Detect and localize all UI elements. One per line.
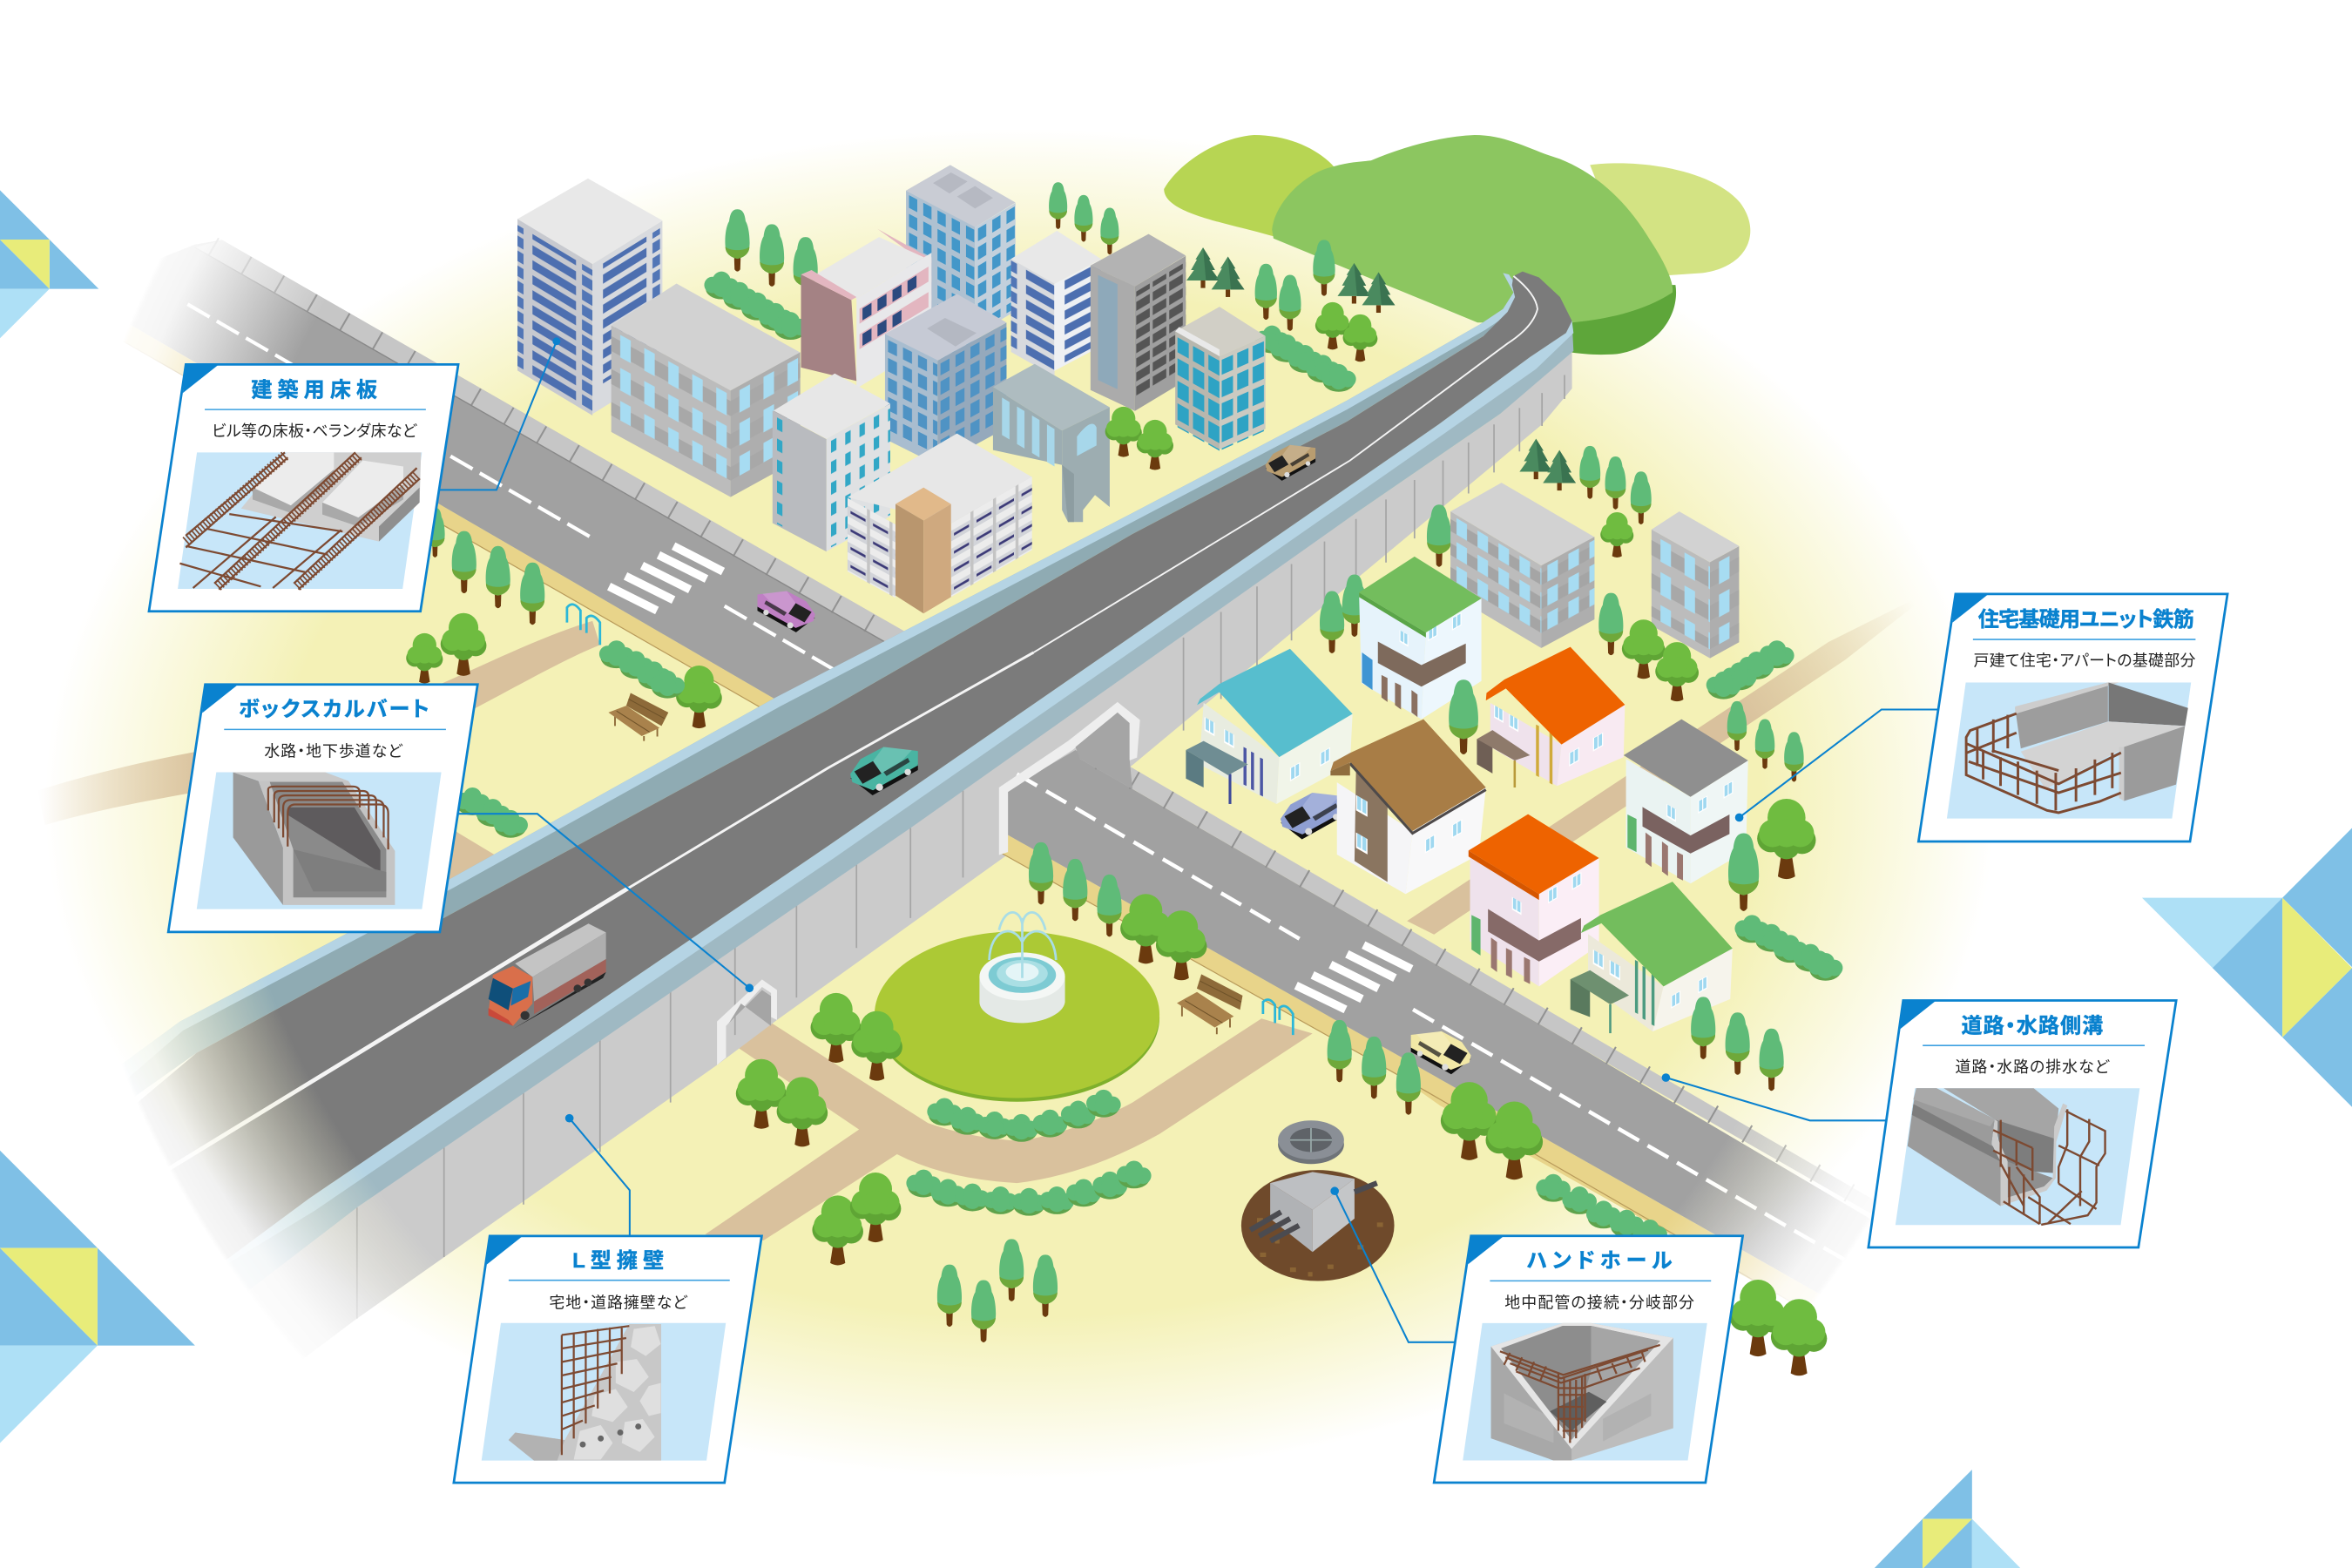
truck on highway [489, 923, 606, 1029]
illustration: hand hole [1463, 1323, 1707, 1460]
connector dots [552, 337, 1743, 1195]
car: pink on road [757, 591, 815, 632]
apartment block A [1427, 439, 1652, 648]
title: ハンドホール [1527, 1249, 1673, 1273]
description: 道路・水路の排水など [1956, 1058, 2110, 1076]
illustration: side ditch [1896, 1088, 2139, 1225]
hedges [456, 640, 1667, 1247]
roads and highway with soft circular fade [125, 238, 1855, 1335]
decorative triangles top-left [0, 190, 98, 338]
connector: house foundation [1740, 709, 1938, 817]
bench near lawn [1177, 974, 1242, 1034]
trees right of hand hole panel [1730, 1280, 1827, 1375]
building: beige with teal windows [1175, 307, 1266, 450]
highway road surface [141, 272, 1571, 1253]
panel: 道路・水路側溝 [1869, 1001, 2176, 1247]
building: white stripes [1011, 231, 1101, 376]
bench left [608, 693, 668, 741]
description: 水路・地下歩道など [264, 742, 403, 760]
highway retaining wall [195, 351, 1572, 1373]
trees around apartments [1320, 512, 1794, 701]
fountain [979, 912, 1065, 1023]
apartment block B [1652, 511, 1739, 659]
house: grey roof [1624, 720, 1748, 883]
connector: hand hole [1335, 1191, 1455, 1342]
tunnel portal right [999, 702, 1140, 855]
building: blue windows, centre [885, 294, 1006, 465]
manhole cover [1278, 1120, 1344, 1164]
round trees by buildings [1105, 407, 1173, 470]
trees behind buildings [704, 182, 1119, 340]
title: 道路・水路側溝 [1962, 1015, 2103, 1038]
connector: box culvert [459, 814, 749, 988]
description: 戸建て住宅・アパートの基礎部分 [1974, 652, 2195, 670]
tunnel portal left [717, 979, 777, 1065]
trees in the park and along the road [406, 508, 1543, 1342]
panel: ボックスカルバート [168, 685, 477, 932]
lawn circle [875, 931, 1159, 1102]
hand hole in soil [1241, 1170, 1395, 1281]
title: ボックスカルバート [239, 698, 429, 721]
building: blue windows, rear [906, 165, 1016, 377]
road: upper left [125, 238, 904, 707]
panel: L型擁壁 [454, 1236, 761, 1483]
building: white tall front [773, 374, 890, 551]
car: teal on highway [850, 747, 918, 795]
car: tan on highway [1266, 445, 1315, 481]
house: orange roof lower [1469, 814, 1599, 986]
title: 建築用床板 [251, 378, 377, 402]
illustration: L-type retaining wall [482, 1323, 726, 1461]
illustration: slab with trusses [178, 452, 422, 590]
description: 地中配管の接続・分岐部分 [1504, 1294, 1694, 1311]
connector: L-type wall [570, 1119, 630, 1236]
connector: floor slab [438, 341, 557, 490]
car: blue parked [1281, 793, 1346, 840]
decorative triangles right [2142, 828, 2352, 1107]
house: teal roof [1186, 649, 1353, 804]
building: grey mid-rise [612, 283, 801, 497]
highway upper guard band [90, 273, 1523, 1118]
highway lower guard band [244, 321, 1573, 1275]
title: L型擁壁 [572, 1249, 664, 1273]
building: arched grey-blue [993, 364, 1110, 522]
connector: road side ditch [1666, 1078, 1887, 1120]
tan walking paths [37, 600, 1914, 1240]
trees lower right of road [1691, 997, 1784, 1091]
bicycle stops [567, 605, 1293, 1035]
trees by grey house [1449, 679, 1842, 981]
building: tall with blue stripes [517, 179, 662, 416]
title: 住宅基礎用ユニット鉄筋 [1978, 608, 2194, 632]
illustration: unit rebar foundation [1947, 682, 2191, 819]
trees beside beige building [1186, 240, 1395, 392]
house: brown roof [1330, 720, 1486, 894]
description: 宅地・道路擁壁など [549, 1294, 688, 1312]
panel: 建築用床板 [149, 364, 458, 612]
building: dark grey tower [1091, 234, 1186, 411]
house: green roof lower right [1571, 882, 1733, 1033]
panel: 住宅基礎用ユニット鉄筋 [1918, 594, 2227, 841]
decorative triangles bottom-left [0, 1151, 195, 1443]
illustration: box culvert [197, 772, 442, 909]
description: ビル等の床板・ベランダ床など [212, 422, 417, 440]
road: lower right [1002, 750, 1855, 1301]
panel: ハンドホール [1434, 1236, 1743, 1483]
decorative triangles bottom-right [1874, 1470, 2021, 1568]
hills behind the highway [1164, 135, 1750, 355]
car: cream on road [1411, 1031, 1471, 1074]
house: orange roof pink walls [1477, 647, 1625, 787]
house: green roof [1359, 557, 1482, 720]
building: pink [801, 229, 931, 389]
building: balcony apartment with tan tower [848, 434, 1032, 613]
